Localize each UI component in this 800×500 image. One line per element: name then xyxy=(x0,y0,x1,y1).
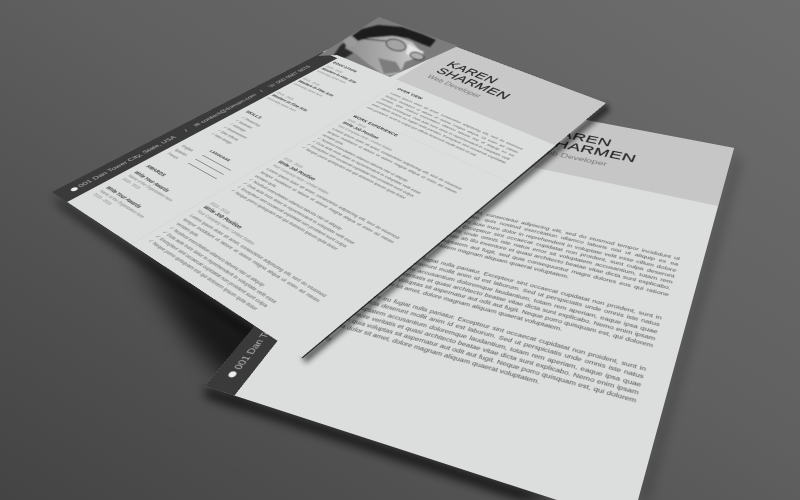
skill list: ✓ InDesign xyxy=(228,122,248,132)
award 2: Name of the Organization here xyxy=(98,189,147,219)
contact text: / xyxy=(259,90,265,93)
sidebar divider xyxy=(131,81,402,244)
entry 2: Masters in Fine Arts xyxy=(297,80,335,97)
job 2: ✓ Duis aute irure dolor in reprehenderit in voluptate velit esse xyxy=(241,181,357,245)
job 2: Lorem ipsum dolor sit amet, consectetur adipiscing elit, sed do eiusmod tempor incididunt ut labore et dolore magna aliqua ut enim ad minim veniam quis. xyxy=(253,167,401,244)
job 1: ✓ Nostrud exercitation ullamco laboris nisi ut aliquip xyxy=(316,136,410,183)
panel: overview xyxy=(365,87,524,164)
entry 2: 2015 - 2015 xyxy=(302,77,321,86)
job 2: 2015 - 2015 xyxy=(282,157,304,169)
contact text: ✉ contact@domain.com xyxy=(192,93,258,128)
job 3: Your Company Here / United States xyxy=(195,209,257,246)
name: KAREN xyxy=(546,126,614,149)
language labels: Spanish xyxy=(173,148,189,157)
job 3: ✓ Excepteur sint occaecat cupidatat non proident sunt culpa xyxy=(154,234,270,308)
award 2: Write Your Awards xyxy=(104,185,143,209)
contact text: ☏ 000 0987 9876 xyxy=(267,65,312,88)
portrait photo xyxy=(318,17,458,77)
skill list: ✓ Web design xyxy=(210,132,234,145)
skill list: ✓ Photoshop xyxy=(240,116,262,127)
language labels: English xyxy=(180,144,195,152)
panel: skills xyxy=(210,110,263,145)
name: SHARMEN xyxy=(540,136,638,165)
panel: education xyxy=(265,61,358,112)
front sheet: resume xyxy=(52,20,606,357)
award 1: 2015 - 2015 xyxy=(120,177,142,190)
heading: WORK EXPERIENCE xyxy=(352,115,400,137)
award 1: Name of the Organization here xyxy=(127,174,175,202)
skill list xyxy=(210,116,262,145)
entry 1: 2015 - 2015 xyxy=(325,65,344,74)
job 1: ✓ Excepteur sint occaecat cupidatat non proident sunt culpa xyxy=(306,143,416,198)
skill list: ✓ Dreamweaver xyxy=(222,125,249,139)
heading: EDUCATION xyxy=(332,61,358,73)
job 2: ✓ Nostrud exercitation ullamco laboris nisi ut aliquip xyxy=(247,178,344,231)
heading: OVER VIEW xyxy=(396,87,424,100)
award 1: Write Your Awards xyxy=(133,170,171,193)
overview text: Lorem ipsum dolor sit amet, consectetur adipiscing elit, sed do eiusmod tempor incididunt ut labore et dolore magna aliqua. Ut enim ad minim veniam, quis nostrud exercitation ullamco laboris nisi ut aliquip ex ea commodo consequat. Duis aute irure dolor in reprehenderit in voluptate velit esse cillum dolore eu fugiat nulla pariatur. Excepteur sint occaecat cupidatat non proident, sunt in culpa qui officia deserunt mollit anim id est. xyxy=(365,92,524,164)
job 3: 2015 - 2015 xyxy=(208,201,232,215)
name: KAREN xyxy=(443,60,502,85)
name: SHARMEN xyxy=(432,66,514,101)
job 1: Lorem ipsum dolor sit amet, consectetur adipiscing elit, sed do eiusmod tempor incididunt ut labore et dolore magna aliqua ut enim ad minim veniam quis. xyxy=(321,127,463,194)
job 2: Write Job Position xyxy=(277,160,317,181)
job 1: Your Company Here / United States xyxy=(336,124,394,152)
skill list: ✓ Illustrator xyxy=(234,119,254,129)
language labels: French xyxy=(166,152,180,160)
entry 3: Masters in Fine Arts xyxy=(270,94,309,112)
paragraph 2: Ut enim dolore eu fugiat nulla pariatur. Excepteur sint occaecat cupidatat non proident, sunt in culpa qui officia deserunt mollit anim id est laborum. Sed ut perspiciatis unde omnis iste natus error sit voluptatem accusantium doloremque laudantium, totam rem aperiam, eaque ipsa quae ab illo inventore veritatis et quasi architecto beatae vitae dicta sunt explicabo. Nemo enim ipsam voluptatem quia voluptas sit aspernatur aut odit aut fugit. Neque porro quisquam est, qui dolorem ipsum quia dolor sit amet, dolore magnam aliquam quaerat voluptatem. xyxy=(345,242,663,349)
contact text: 001 Dan Tower City, State, USA xyxy=(77,135,178,188)
job 1: ✓ Neque porro quisquam est qui dolorem ipsum quia dolor xyxy=(300,146,407,200)
contact band xyxy=(52,52,337,202)
job 3: Lorem ipsum dolor sit amet, consectetur adipiscing elit, sed do eiusmod tempor incididunt ut labore et dolore magna aliqua ut enim ad minim veniam quis. xyxy=(175,213,328,303)
job 1: 2015 - 2015 xyxy=(346,118,367,129)
panel: work experience xyxy=(147,115,463,311)
job 1: Write Job Position xyxy=(341,121,380,140)
heading: LANGUAGE xyxy=(208,150,231,162)
paragraph 3: Ut enim dolore eu fugiat nulla pariatur. Excepteur sint occaecat cupidatat non proident, sunt in culpa qui officia deserunt mollit anim id est laborum. Sed ut perspiciatis unde omnis iste natus error sit voluptatem accusantium doloremque laudantium, totam rem aperiam, eaque ipsa quae ab illo inventore veritatis et quasi architecto beatae vitae dicta sunt explicabo. Nemo enim ipsam voluptatem quia voluptas sit aspernatur aut odit aut fugit. Neque porro quisquam est, qui dolorem ipsum quia dolor sit amet, dolore magnam aliquam quaerat voluptatem. xyxy=(310,283,647,405)
heading: SKILLS xyxy=(244,110,263,119)
back sheet: cover letter text xyxy=(304,126,681,405)
heading: AWARDS xyxy=(144,164,168,177)
header band xyxy=(396,46,606,145)
language labels xyxy=(166,144,195,160)
skill list: ✓ After Effects xyxy=(216,129,240,142)
job 3: ✓ Nostrud exercitation ullamco laboris nisi ut aliquip xyxy=(168,226,267,288)
entry 3: University name here xyxy=(265,96,298,112)
panel: language xyxy=(166,144,231,179)
job 2: ✓ Excepteur sint occaecat cupidatat non proident sunt culpa xyxy=(235,185,349,248)
entry 1: University name here xyxy=(316,70,347,84)
job 3: Write Job Position xyxy=(202,205,244,230)
contact band on back sheet xyxy=(205,94,469,396)
contact text: 001 Dan Tower City, State, USA xyxy=(231,268,322,371)
contact text xyxy=(70,65,312,192)
entry 1: Masters in Fine Arts xyxy=(320,67,358,84)
contact text: / xyxy=(183,129,190,132)
footer word: property xyxy=(304,329,334,343)
job 3: ✓ Duis aute irure dolor in reprehenderit in voluptate velit esse xyxy=(161,230,279,305)
job 2: Your Company Here / United States xyxy=(271,163,330,195)
job 1: ✓ Duis aute irure dolor in reprehenderit in voluptate velit esse xyxy=(311,139,423,195)
section divider xyxy=(352,111,511,183)
job title: Web Developer xyxy=(425,74,483,99)
panel: awards xyxy=(92,164,175,219)
contact text xyxy=(205,268,322,396)
award 2: 2015 - 2015 xyxy=(92,192,114,206)
job 3 xyxy=(147,201,328,311)
level lines xyxy=(188,155,231,179)
job title: Web Developer xyxy=(536,147,608,168)
job 3: ✓ Neque porro quisquam est qui dolorem ipsum quia dolor xyxy=(147,238,260,311)
entry 3: 2015 - 2015 xyxy=(275,91,295,101)
entry 2: University name here xyxy=(292,82,324,97)
paragraph 1: Lorem ipsum dolor sit amet, consectetur adipiscing elit, sed do eiusmod tempor incididunt ut labore in ad minim veniam, quis nostrud exercitation ullamco laboris nisi ut aliquip ex ea commodo consequat. Duis aute irure dolor in reprehenderit in voluptate velit esse cillum dolore eu fugiat nulla pariatur. Excepteur sint occaecat cupidatat non proident, sunt culpa deserunt mollit. Sed ut perspiciatis unde omnis iste natus error sit voluptatem accusantium, totam rem aperiam, eaque ipsa quae ab illo inventore et quasi architecto beatae vitae dicta sunt explicabo. Nemo enim ipsam voluptatem aut fugit, sed quia consequuntur magni dolores eos qui ratione sequi nesciunt. Qui dolorem magnam aliquam quaerat voluptatem. xyxy=(377,194,681,298)
job 2: ✓ Neque porro quisquam est qui dolorem ipsum quia dolor xyxy=(229,188,340,251)
